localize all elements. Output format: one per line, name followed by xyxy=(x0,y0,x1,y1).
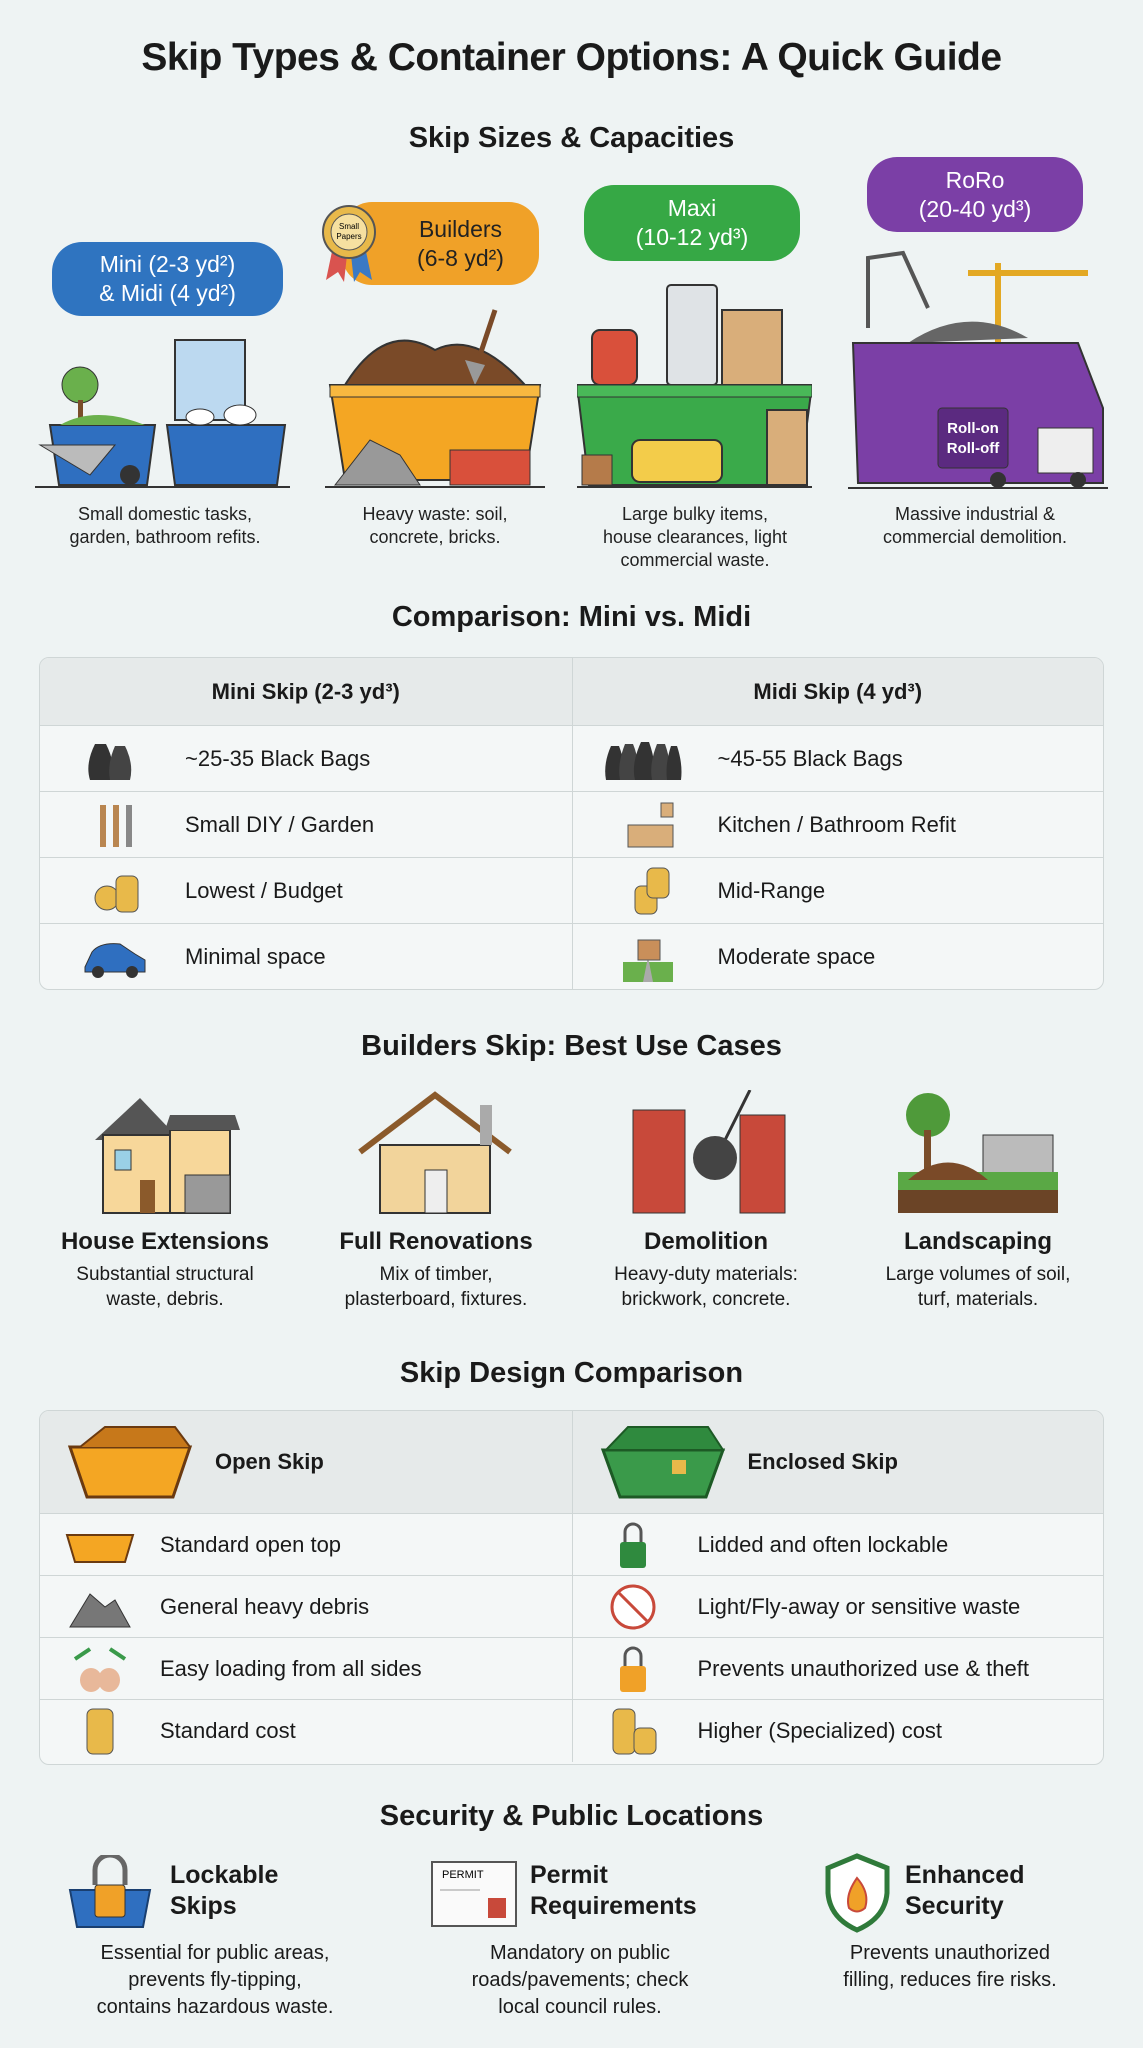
item: lockable skips: Lockable xyxy=(170,1861,278,1889)
table: open vs enclosed: Lidded and often lockable xyxy=(698,1532,948,1556)
caption: mini: garden, bathroom refits. xyxy=(69,527,261,547)
caption: mini: Small domestic tasks, xyxy=(78,504,252,524)
caption: mini xyxy=(69,504,261,547)
item: lockable skips: Essential for public areas, xyxy=(100,1942,330,1964)
illustration: builders skip xyxy=(325,309,545,488)
item: enhanced security xyxy=(826,1853,1057,1991)
heading: skip sizes: Skip Sizes & Capacities xyxy=(409,122,734,154)
item: lockable skips: Skips xyxy=(170,1892,237,1920)
caption: maxi: Large bulky items, xyxy=(622,504,768,524)
heading: mini vs midi: Comparison: Mini vs. Midi xyxy=(392,601,751,633)
illustration: mini skips xyxy=(35,339,290,488)
item: permit requirements: Requirements xyxy=(530,1892,697,1920)
table: mini vs midi: Kitchen / Bathroom Refit xyxy=(718,812,956,836)
caption: builders: Heavy waste: soil, xyxy=(362,504,508,524)
table: open vs enclosed: Higher (Specialized) cost xyxy=(698,1718,942,1743)
pill: roro: (20-40 yd³) xyxy=(919,196,1031,222)
icon: demolition xyxy=(632,1090,786,1214)
item: lockable skips: prevents fly-tipping, xyxy=(128,1969,302,1991)
use case: demolition: Heavy-duty materials: xyxy=(614,1264,798,1285)
pill: builders: Builders xyxy=(419,216,502,242)
table: open vs enclosed: General heavy debris xyxy=(160,1594,369,1618)
illustration: maxi skip xyxy=(577,284,812,488)
pill: mini midi xyxy=(52,242,283,316)
caption: maxi xyxy=(603,504,787,570)
item: lockable skips: contains hazardous waste. xyxy=(97,1996,333,2018)
pill: builders: (6-8 yd²) xyxy=(417,244,504,270)
icon: badge xyxy=(322,205,376,282)
table: open vs enclosed: Standard cost xyxy=(160,1718,296,1743)
pill: builders xyxy=(342,202,539,285)
use case: landscaping: Landscaping xyxy=(904,1228,1052,1255)
table: open vs enclosed: Prevents unauthorized use & theft xyxy=(698,1656,1029,1680)
item: lockable skips xyxy=(68,1855,333,2018)
table: open vs enclosed: Light/Fly-away or sensitive waste xyxy=(698,1594,1020,1618)
table: mini vs midi: Mid-Range xyxy=(718,878,825,902)
table: open vs enclosed: Easy loading from all sides xyxy=(160,1656,422,1680)
icon: lockable skip xyxy=(68,1855,152,1928)
table: open vs enclosed: Enclosed Skip xyxy=(748,1449,898,1474)
table: mini vs midi: Midi Skip (4 yd³) xyxy=(753,678,922,704)
table: mini vs midi: Small DIY / Garden xyxy=(185,812,374,836)
icon: badge: Papers xyxy=(336,232,362,241)
caption: maxi: house clearances, light xyxy=(603,527,787,547)
icon: permit xyxy=(431,1861,517,1927)
use case: landscaping: turf, materials. xyxy=(918,1289,1038,1310)
item: permit requirements: local council rules. xyxy=(498,1996,662,2018)
item: permit requirements: Permit xyxy=(530,1861,608,1889)
table: mini vs midi xyxy=(39,657,1104,990)
illustration: roro xyxy=(848,250,1108,489)
pill: maxi: (10-12 yd³) xyxy=(636,224,748,250)
item: enhanced security: Prevents unauthorized xyxy=(850,1942,1050,1964)
table: open vs enclosed xyxy=(39,1410,1104,1765)
table: open vs enclosed: Standard open top xyxy=(160,1532,341,1556)
use case: landscaping: Large volumes of soil, xyxy=(886,1264,1070,1285)
pill: maxi xyxy=(584,185,800,261)
use case: house extensions xyxy=(61,1228,269,1310)
use case: full renovations: Mix of timber, xyxy=(380,1264,492,1285)
item: permit requirements: Mandatory on public xyxy=(490,1942,670,1964)
illustration: roro: Roll-off xyxy=(947,440,1000,457)
icon: permit: PERMIT xyxy=(442,1869,484,1881)
pill: maxi: Maxi xyxy=(668,195,716,221)
use case: full renovations: Full Renovations xyxy=(339,1228,533,1255)
heading: builders use cases: Builders Skip: Best Use Cases xyxy=(361,1030,782,1062)
pill: roro: RoRo xyxy=(946,166,1004,192)
use case: full renovations: plasterboard, fixtures. xyxy=(345,1289,527,1310)
caption: roro: Massive industrial & xyxy=(895,504,1055,524)
caption: roro: commercial demolition. xyxy=(883,527,1067,547)
use case: demolition: Demolition xyxy=(644,1228,768,1255)
icon: renovation xyxy=(358,1091,512,1214)
use case: demolition: brickwork, concrete. xyxy=(622,1289,790,1310)
item: permit requirements xyxy=(431,1861,697,2018)
caption: builders: concrete, bricks. xyxy=(369,527,501,547)
icon: landscaping xyxy=(898,1093,1058,1213)
pill: mini midi: Mini (2-3 yd²) xyxy=(100,251,235,277)
use case: house extensions: waste, debris. xyxy=(106,1289,224,1310)
table: open vs enclosed: Open Skip xyxy=(215,1449,324,1474)
heading: security: Security & Public Locations xyxy=(380,1800,763,1832)
use case: full renovations xyxy=(339,1228,533,1310)
caption: builders xyxy=(362,504,508,547)
use case: demolition xyxy=(614,1228,798,1310)
table: mini vs midi: ~45-55 Black Bags xyxy=(718,746,903,770)
use case: house extensions: Substantial structural xyxy=(76,1264,254,1285)
item: enhanced security: filling, reduces fire risks. xyxy=(843,1969,1057,1991)
item: enhanced security: Enhanced xyxy=(905,1861,1024,1889)
use case: landscaping xyxy=(886,1228,1070,1310)
heading: skip design comparison: Skip Design Comparison xyxy=(400,1357,743,1389)
caption: roro xyxy=(883,504,1067,547)
table: mini vs midi: Moderate space xyxy=(718,944,875,968)
use case: house extensions: House Extensions xyxy=(61,1228,269,1255)
icon: house xyxy=(95,1098,240,1214)
pill: roro xyxy=(867,157,1083,232)
title: Skip Types & Container Options: A Quick Guide xyxy=(141,36,1002,79)
pill: mini midi: & Midi (4 yd²) xyxy=(99,280,236,306)
item: enhanced security: Security xyxy=(905,1892,1004,1920)
icon: badge: Small xyxy=(339,222,359,231)
table: mini vs midi: Minimal space xyxy=(185,944,326,968)
caption: maxi: commercial waste. xyxy=(620,550,770,570)
table: mini vs midi: ~25-35 Black Bags xyxy=(185,746,370,770)
illustration: roro: Roll-on xyxy=(947,420,999,437)
table: mini vs midi: Mini Skip (2-3 yd³) xyxy=(212,678,400,704)
icon: shield xyxy=(826,1853,890,1933)
item: permit requirements: roads/pavements; check xyxy=(472,1969,688,1991)
table: mini vs midi: Lowest / Budget xyxy=(185,878,343,902)
